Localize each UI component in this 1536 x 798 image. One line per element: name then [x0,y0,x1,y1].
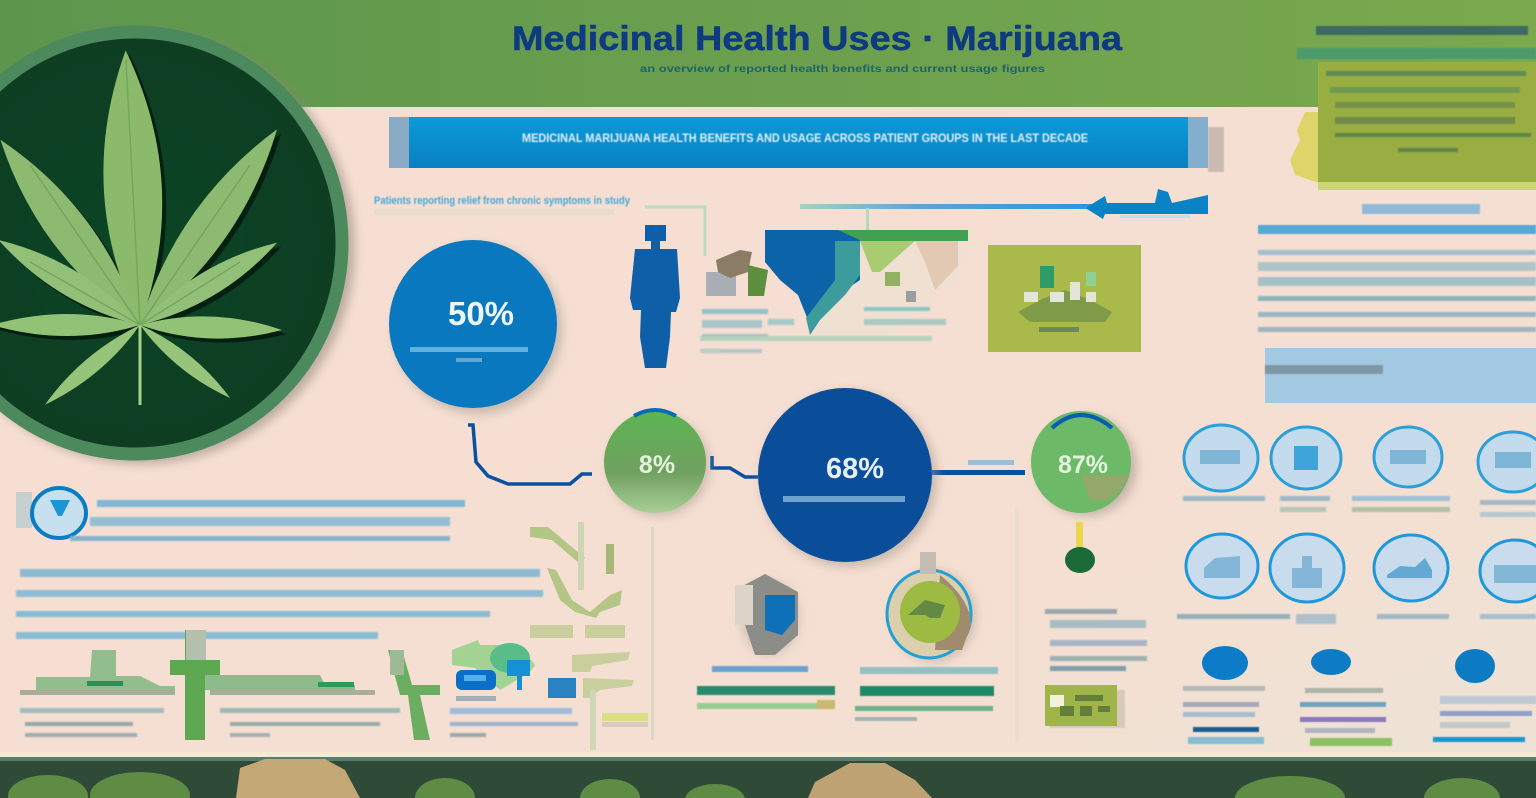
blue droplet 1 [1202,646,1248,680]
light green wedge [860,241,915,272]
section heading left: Patients reporting relief from chronic symptoms in study [374,195,631,207]
bubble 4 [1478,432,1536,492]
shadow [1050,690,1125,728]
bottom center icon: house [735,574,800,656]
blue droplet 3 [1455,649,1495,683]
cross top [186,630,206,660]
bubble labels row 1 [1183,496,1536,517]
light part [735,585,753,625]
blue highlight [464,675,486,681]
bubble 7 [1374,535,1448,601]
plant base [1018,290,1112,322]
banner body [389,117,1208,168]
bubble 3 [1374,427,1442,487]
blue banner [389,117,1224,172]
inner circle [900,581,960,643]
bubble 5 [1186,534,1258,598]
value: 8% [639,451,675,479]
disc shading [1081,475,1128,501]
disc [758,388,932,562]
banner shadow [1208,127,1224,172]
bubble grid row 1 [1184,425,1536,492]
panel fill [988,245,1141,352]
circle shadow [0,30,355,464]
shadow [394,244,562,414]
droplet text column 3 [1433,696,1536,742]
connector green left [645,207,705,256]
tall bamboo plant [530,522,648,750]
plant stem [1040,266,1054,288]
blue block one [456,670,496,690]
foliage accent [490,643,530,673]
arrow head [1087,189,1208,219]
green mini table [1045,685,1125,728]
icon row left: info badge [16,488,86,538]
stat circle green right [1031,411,1137,516]
cannabis leaf [0,49,297,411]
blue droplet 2 [1311,649,1351,675]
dark accent left [87,681,123,686]
cells [1060,695,1110,716]
box [1045,685,1117,726]
stat circle navy 68% [758,388,937,567]
blue block two [507,660,530,690]
dark green disc [0,32,342,454]
icon: torch [1065,522,1095,573]
bottom center caption two [855,667,998,721]
rock left [236,759,360,798]
caption [783,496,905,502]
connector stem [866,208,869,232]
small label [456,358,482,362]
green foliage [452,640,535,690]
inner mark [908,600,945,618]
panel body [1318,62,1536,188]
light blue box [1265,348,1536,403]
right column text [1258,250,1536,332]
landscape captions [20,708,578,737]
figure right [388,650,440,740]
disc [604,411,706,513]
arrow highlight [1120,215,1190,218]
bubble 2 [1271,427,1341,489]
rule [410,347,528,352]
landscape illustration left [20,630,440,740]
hero circle with cannabis leaf [0,30,355,464]
ground mid [210,690,375,695]
rim [1052,415,1112,428]
hills left [36,650,175,690]
shadow [761,391,937,567]
caption [1039,327,1079,332]
yellow blot [1290,112,1325,185]
figure right top [390,650,404,675]
white blocks [1024,282,1096,302]
bubble 1 [1184,425,1258,491]
white corner [1050,695,1064,707]
badge right shade [935,575,971,650]
trees [8,772,1500,798]
dark band [0,757,1536,798]
hills mid [205,675,355,690]
stat circle green left [604,410,710,516]
small grey plant icon [706,250,768,296]
curved connector left [468,425,592,484]
value: 50% [448,295,514,332]
divider vertical right [1015,508,1019,742]
bottom center caption one [697,666,835,709]
disc [389,240,557,408]
olive square panel [988,245,1141,352]
small grey marker [906,291,916,302]
banner right cap [1188,117,1208,168]
droplet text column 2 [1300,688,1392,746]
funnel captions [700,307,946,353]
panel bottom edge [1318,182,1536,190]
cream edge [0,752,1536,757]
bubble 6 [1270,534,1344,602]
light right panel [810,232,968,340]
bottom center icon: green badge [887,552,976,662]
blue funnel [765,230,860,325]
blue part [765,595,795,635]
stat circle 50% [389,240,562,414]
bubble labels row 2 [1177,614,1536,624]
paragraph [16,569,543,639]
rim [634,410,676,416]
connector right [932,470,1025,475]
value: 68% [826,453,884,485]
badge top [920,552,936,574]
badge ring [887,570,971,658]
teal funnel side [806,241,860,335]
cross figure left [170,630,220,740]
heading underline [374,209,614,215]
connector label [968,460,1014,465]
arrow shaft [800,204,1100,209]
body [735,574,798,655]
title: Medicinal Health Uses · Marijuana [512,20,1123,58]
plant stem right [1086,272,1096,286]
banner text: MEDICINAL MARIJUANA HEALTH BENEFITS AND USAGE ACROSS PATIENT GROUPS IN THE LAST DECADE [522,131,1088,145]
banner left cap [389,117,409,168]
bubble glyphs row 2 [1204,556,1536,588]
panel text lines [1326,71,1531,152]
divider vertical mid [651,527,654,740]
right column subheading [1258,225,1536,234]
shadow [740,580,800,656]
rock right [808,763,932,798]
small green marker [885,272,900,286]
box fill [1265,348,1536,403]
right column heading [1362,204,1480,214]
header banner [0,0,1536,107]
text block under torch [1045,609,1147,671]
subtitle: an overview of reported health benefits and current usage figures [640,64,1046,75]
green top bar [835,230,968,241]
shadow [892,570,976,662]
connector middle [712,456,758,477]
top right: heading lines [1297,26,1536,59]
shadow [1037,416,1137,516]
band top edge [0,757,1536,761]
bottom strip [0,752,1536,798]
blue block three [548,678,576,698]
small plant with blue icons [452,640,576,701]
bubble 8 [1480,540,1536,602]
small caption [456,696,496,701]
droplet text column 1 [1183,686,1265,744]
shadow [608,416,710,516]
small text under plant icon [702,309,768,353]
value: 87% [1058,451,1108,479]
box label [1265,365,1383,374]
left text block [70,500,465,541]
icon: person [630,225,680,368]
ground left [20,690,175,695]
arrow line top right [800,189,1208,232]
bubble glyphs row 1 [1200,446,1531,470]
funnel chart [765,230,968,340]
tan wedge [915,241,958,290]
top right: olive note panel [1290,62,1536,190]
bubble grid row 2 [1186,534,1536,602]
disc [1031,411,1131,513]
dark accent mid [318,682,354,687]
